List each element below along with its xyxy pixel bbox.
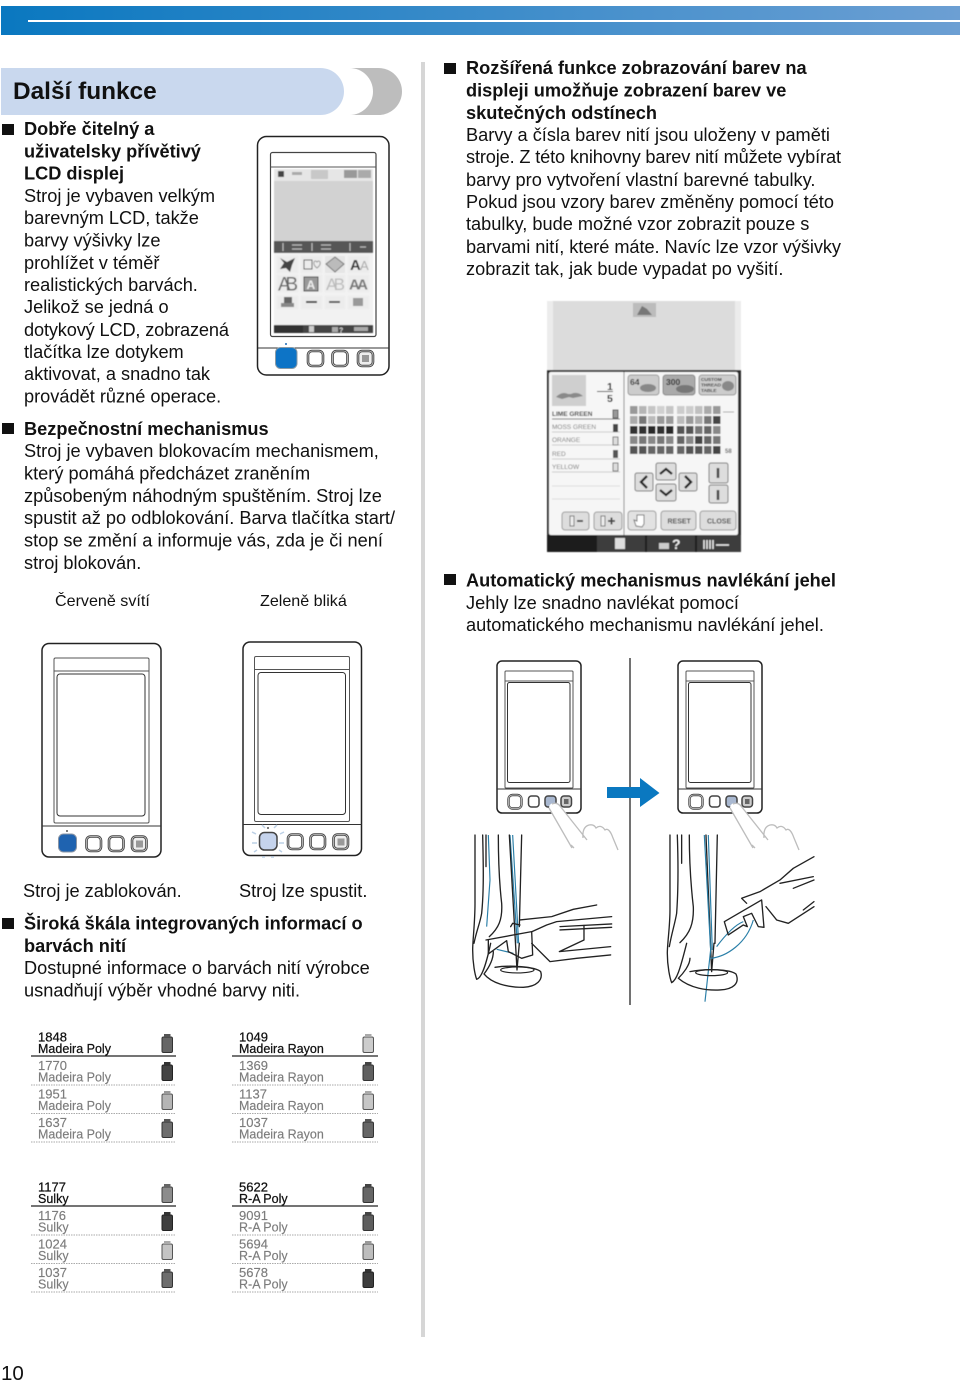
text block: LCD displej: prohlížet v téměř bbox=[24, 253, 160, 273]
thread list: Sulky: Sulky bbox=[38, 1220, 69, 1234]
thread list: Madeira Rayon: 1137 bbox=[239, 1086, 267, 1102]
divider between threading steps bbox=[629, 658, 631, 1005]
thread list: Sulky: 1024 bbox=[38, 1236, 67, 1252]
text block: thread colour information: barvách nití bbox=[24, 936, 127, 956]
caption: Červeně svítí: Červeně svítí bbox=[55, 591, 150, 610]
text block: automatic needle threader: automatického mechanismu navlékání jehel. bbox=[466, 615, 824, 635]
bottom controls: RESET, CLOSE: CLOSE bbox=[707, 518, 731, 526]
machine panel: locked, solid blue button bbox=[42, 644, 161, 857]
thread list: Sulky: 1177 bbox=[38, 1180, 66, 1194]
text block: LCD displej: provádět různé operace. bbox=[24, 386, 221, 406]
colour swatch grid bbox=[630, 406, 734, 455]
text block: LCD displej: LCD displej bbox=[24, 164, 124, 184]
thread list: Madeira Poly: 1848 bbox=[38, 1030, 67, 1044]
text block: LCD displej: tlačítka lze dotykem bbox=[24, 342, 184, 362]
LCD screen image: AB bbox=[278, 274, 298, 296]
text block: extended colour display: Rozšířená funkce zobrazování barev na bbox=[466, 58, 808, 78]
thread name list: MOSS GREEN bbox=[552, 424, 596, 431]
icon: finger pressing button, step 2 bbox=[730, 803, 799, 850]
text block: Bezpečnostní mechanismus: stroj blokován. bbox=[24, 553, 141, 573]
LCD screen image: A bbox=[350, 257, 361, 274]
text block: LCD displej: Stroj je vybaven velkým bbox=[24, 186, 215, 206]
thread list: Madeira Poly: 1951 bbox=[38, 1086, 67, 1102]
caption: Stroj je zablokován.: Stroj je zablokován. bbox=[23, 881, 182, 901]
text block: thread colour information: Široká škála integrovaných informací o bbox=[24, 912, 363, 934]
thread list: Madeira Rayon: Madeira Rayon bbox=[239, 1099, 324, 1113]
thread name list: ORANGE bbox=[552, 437, 581, 444]
text block: extended colour display: tabulky, bude možné vzor zobrazit pouze s bbox=[466, 214, 809, 234]
thread table tabs: 300 bbox=[666, 377, 680, 387]
text block: extended colour display bbox=[444, 58, 842, 279]
LCD screen image: A bbox=[360, 258, 369, 273]
text block: automatic needle threader: Automatický mechanismus navlékání jehel bbox=[466, 570, 836, 590]
text block: extended colour display: Pokud jsou vzory barev změněny pomocí této bbox=[466, 192, 834, 212]
thread list: Sulky: Sulky bbox=[38, 1192, 69, 1206]
thread list: Madeira Rayon: 1369 bbox=[239, 1058, 268, 1073]
thread list: R-A Poly: 5622 bbox=[239, 1180, 268, 1194]
text block: thread colour information: Dostupné informace o barvách nití výrobce bbox=[24, 958, 370, 978]
thread list: Madeira Rayon: 1049 bbox=[239, 1030, 268, 1044]
thread list: Madeira Poly: Madeira Poly bbox=[38, 1099, 112, 1113]
text block: extended colour display: barvy pro vytvoření vlastní barevné tabulky. bbox=[466, 170, 815, 190]
text block: LCD displej: dotykový LCD, zobrazená bbox=[24, 320, 230, 340]
thread table tabs: TABLE bbox=[701, 388, 717, 394]
thread list: Madeira Poly bbox=[31, 1030, 176, 1142]
text block: automatic needle threader bbox=[444, 570, 836, 635]
thread list: R-A Poly: 5694 bbox=[239, 1236, 268, 1252]
thread list: Madeira Rayon bbox=[232, 1030, 378, 1142]
machine panel: ready, blinking button bbox=[243, 642, 362, 857]
thread list: Sulky: Sulky bbox=[38, 1278, 69, 1292]
thread list: R-A Poly: R-A Poly bbox=[239, 1278, 288, 1292]
thread list: Madeira Rayon: Madeira Rayon bbox=[239, 1070, 324, 1084]
icon: finger pressing button, step 1 bbox=[549, 803, 618, 850]
text block: automatic needle threader: Jehly lze snadno navlékat pomocí bbox=[466, 593, 739, 613]
thread name list: LIME GREEN bbox=[552, 411, 593, 418]
thread name list bbox=[552, 410, 620, 499]
text block: extended colour display: stroje. Z této knihovny barev nití můžete vybírat bbox=[466, 147, 841, 167]
text block: LCD displej: barevným LCD, takže bbox=[24, 208, 199, 228]
text block: Bezpečnostní mechanismus bbox=[2, 419, 396, 573]
thread list: R-A Poly: R-A Poly bbox=[239, 1249, 288, 1263]
machine panel: threading button pressed, step 1 bbox=[497, 661, 581, 813]
text block: LCD displej: Jelikož se jedná o bbox=[24, 297, 169, 317]
thread list: Madeira Poly: Madeira Poly bbox=[38, 1128, 112, 1142]
section title: Další funkce bbox=[1, 68, 402, 115]
text block: LCD displej bbox=[2, 119, 230, 406]
header band bbox=[1, 6, 960, 35]
text block: LCD displej: aktivovat, a snadno tak bbox=[24, 364, 211, 384]
bottom controls: RESET, CLOSE bbox=[562, 511, 736, 530]
text block: Bezpečnostní mechanismus: Bezpečnostní mechanismus bbox=[24, 419, 269, 439]
arrow: step 1 to step 2 bbox=[607, 778, 660, 807]
arrow keypad bbox=[635, 463, 728, 503]
text block: extended colour display: displeji umožňuje zobrazení barev ve bbox=[466, 80, 786, 100]
thread list: Madeira Rayon: 1037 bbox=[239, 1115, 268, 1130]
bottom status bar: ? bbox=[672, 536, 681, 552]
thread list: Madeira Poly: 1770 bbox=[38, 1058, 67, 1073]
illustration: needle and threader, step 2 bbox=[667, 835, 814, 1002]
illustration: needle and threader, step 1 bbox=[473, 835, 612, 987]
thread list: R-A Poly bbox=[232, 1180, 378, 1292]
thread list: Sulky bbox=[31, 1180, 176, 1292]
text block: extended colour display: zobrazit tak, jak bude vypadat po vyšití. bbox=[466, 259, 783, 279]
text block: extended colour display: Barvy a čísla barev nití jsou uloženy v paměti bbox=[466, 125, 830, 145]
text block: Bezpečnostní mechanismus: spustit až po odblokování. Barva tlačítka start/ bbox=[24, 508, 396, 528]
thread name list: RED bbox=[552, 451, 566, 458]
embroidery thumbnail and fraction bbox=[552, 375, 613, 406]
LCD screen image: ? bbox=[339, 328, 343, 334]
thread list: Madeira Poly: 1637 bbox=[38, 1115, 67, 1130]
thread list: R-A Poly: R-A Poly bbox=[239, 1192, 288, 1206]
LCD screen image: AB bbox=[326, 275, 345, 294]
thread list: R-A Poly: 9091 bbox=[239, 1208, 268, 1223]
text block: thread colour information: usnadňují výběr vhodné barvy niti. bbox=[24, 980, 300, 1000]
text block: extended colour display: skutečných odstínech bbox=[466, 103, 657, 123]
thread list: Madeira Rayon: Madeira Rayon bbox=[239, 1042, 324, 1056]
text block: LCD displej: Dobře čitelný a bbox=[24, 119, 155, 139]
thread table tabs: THREAD bbox=[701, 382, 722, 388]
text block: Bezpečnostní mechanismus: Stroj je vybaven blokovacím mechanismem, bbox=[24, 441, 379, 461]
LCD screen image bbox=[274, 169, 373, 334]
thread list: Sulky: 1176 bbox=[38, 1208, 66, 1223]
text block: LCD displej: barvy výšivky lze bbox=[24, 230, 160, 250]
text block: thread colour information bbox=[2, 912, 370, 1000]
bottom controls: RESET, CLOSE: RESET bbox=[668, 518, 692, 526]
embroidery thumbnail and fraction: 1 bbox=[607, 381, 613, 393]
thread list: Madeira Poly: Madeira Poly bbox=[38, 1070, 112, 1084]
column divider bbox=[421, 62, 425, 1337]
text block: Bezpečnostní mechanismus: který pomáhá předcházet zraněním bbox=[24, 464, 310, 484]
section title: Další funkce: Další funkce bbox=[13, 78, 157, 105]
embroidery thumbnail and fraction: 5 bbox=[607, 393, 613, 405]
thread list: Sulky: 1037 bbox=[38, 1265, 67, 1280]
LCD screen image: A bbox=[306, 278, 316, 292]
colour swatch grid: 58 bbox=[725, 449, 732, 455]
thread name list: YELLOW bbox=[552, 464, 580, 471]
caption: Stroj lze spustit.: Stroj lze spustit. bbox=[239, 881, 367, 901]
thread table tabs bbox=[628, 375, 736, 395]
text block: Bezpečnostní mechanismus: stop se změní a informuje vás, zda je či není bbox=[24, 530, 383, 550]
thread table tabs: 64 bbox=[630, 377, 640, 387]
text block: extended colour display: barvami nití, které máte. Navíc lze vzor výšivky bbox=[466, 237, 842, 257]
caption: Zeleně bliká: Zeleně bliká bbox=[260, 592, 347, 610]
machine panel with LCD home screen bbox=[258, 136, 389, 375]
text block: LCD displej: uživatelsky přívětivý bbox=[24, 142, 202, 162]
bottom status bar bbox=[547, 535, 741, 552]
thread list: Madeira Poly: Madeira Poly bbox=[38, 1042, 112, 1056]
thread list: Madeira Rayon: Madeira Rayon bbox=[239, 1128, 324, 1142]
LCD screenshot: custom thread table bbox=[547, 301, 741, 552]
machine panel: threading button pressed, step 2 bbox=[678, 661, 762, 813]
thread table tabs: CUSTOM bbox=[701, 377, 722, 383]
thread list: R-A Poly: 5678 bbox=[239, 1265, 268, 1280]
LCD screen image: AA bbox=[349, 276, 368, 294]
thread list: R-A Poly: R-A Poly bbox=[239, 1220, 288, 1234]
thread list: Sulky: Sulky bbox=[38, 1249, 69, 1263]
text block: Bezpečnostní mechanismus: způsobeným náhodným spuštěním. Stroj lze bbox=[24, 486, 382, 506]
text block: LCD displej: realistických barvách. bbox=[24, 275, 198, 295]
